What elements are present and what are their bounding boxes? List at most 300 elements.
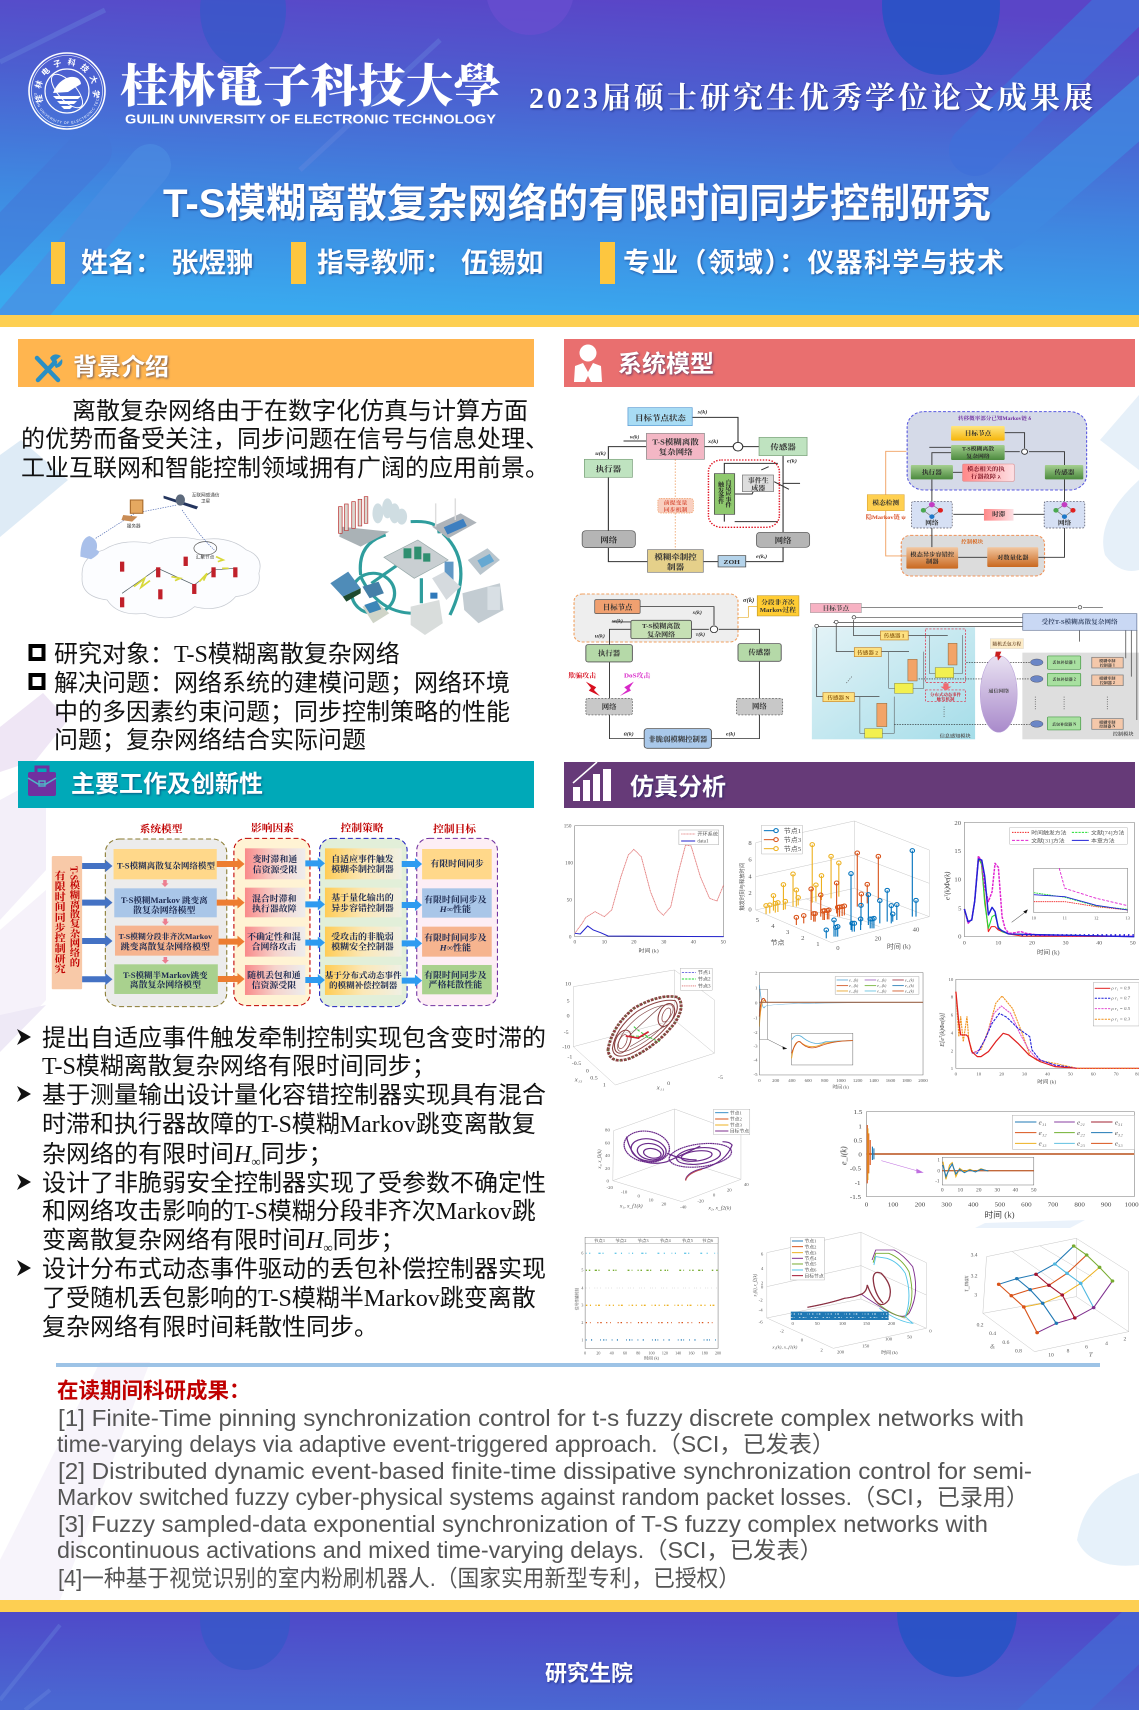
research achievements: [3] Fuzzy sampled-data exponential synchronization of T-S fuzzy complex networks with	[58, 1511, 988, 1537]
innovation bullet list: ∞	[323, 1240, 333, 1255]
chart: synchronization errors with inset: e₃₁	[1115, 1120, 1123, 1126]
chart: Lorenz butterfly attractor: 10	[649, 1198, 654, 1203]
chart: 3D trajectories with event bars: 0	[792, 1321, 795, 1326]
column headings	[140, 822, 478, 836]
chart: synchronization errors with inset: e₁₁	[1039, 1120, 1047, 1126]
innovation bullet list: 提出自适应事件触发牵制控制实现包含变时滞的	[42, 1025, 546, 1052]
diagram: distributed dynamic event: 受控T-S模糊离散复杂网络	[1042, 617, 1118, 626]
diagram: distributed dynamic event: 分布式动态事件	[930, 691, 962, 698]
chart: method comparison curve: 11	[1063, 916, 1067, 920]
chart: 3D trajectories with event bars: -6	[759, 1320, 763, 1324]
chart: error comparison curve: 100	[565, 861, 573, 866]
chart: error comparison curve: 30	[661, 941, 667, 946]
chart: expected error curves: 40	[1045, 1072, 1051, 1077]
chart: 3D phase trajectory: 5	[567, 999, 570, 1004]
diagram: piecewise Markov under attack: 复杂网络	[647, 630, 676, 638]
chart: synchronization errors with inset: 0	[937, 1169, 941, 1174]
author info row: 姓名：	[81, 248, 162, 278]
chart: expected error curves: 60	[1091, 1072, 1096, 1077]
chart: Lorenz butterfly attractor: 40	[744, 1182, 749, 1187]
diagram: Markov jump fault-tolerant: 执行器	[922, 468, 943, 476]
diagram: event-triggered pinning: 触发条件	[716, 481, 724, 505]
chart: method comparison curve: 文献[31]方法	[1031, 837, 1065, 844]
box labels: 模糊安全控制器	[331, 941, 394, 952]
innovation bullet list: 同步；	[261, 1141, 333, 1168]
chart: synchronization errors with inset: 20	[976, 1188, 982, 1193]
header banner	[0, 0, 1139, 330]
chart: event scatter: 200	[715, 1351, 721, 1355]
chart: error comparison curve: 0	[569, 935, 572, 940]
box labels: 离散复杂网络模型	[130, 979, 201, 989]
chart: expected error curves: 6	[951, 1013, 954, 1018]
chart: Lorenz butterfly attractor: 20	[605, 1166, 611, 1171]
simulation charts row 3 and 4	[574, 1109, 1139, 1362]
chart: synchronization errors with inset: e₃₃	[1115, 1141, 1123, 1148]
heading: main work: 主要工作及创新性	[71, 771, 263, 798]
chart: 3D trajectories with event bars: 0	[761, 1285, 764, 1289]
diagram: event-triggered pinning	[582, 408, 810, 572]
diagram: Markov jump fault-tolerant: 模态检测	[872, 498, 900, 507]
illustration: cloud sensor network: 服务器	[127, 522, 141, 529]
heading: main work	[18, 761, 534, 808]
chart: method comparison curve	[943, 820, 1136, 957]
diagram: piecewise Markov under attack: σ(k)	[743, 597, 754, 604]
diagram: distributed dynamic event: 模糊牵制	[1099, 658, 1116, 663]
diagram: piecewise Markov under attack: 传感器	[748, 648, 770, 657]
heading: background: 背景介绍	[73, 354, 169, 381]
innovation bullet list: 了受随机丢包影响的T-S模糊半Markov跳变离散	[42, 1285, 536, 1312]
column headings: 控制策略	[341, 822, 384, 835]
chart: expected error curves: ρ r₁ = 0.3	[1110, 1017, 1131, 1022]
diagram: piecewise Markov under attack: ū(k)	[624, 731, 634, 738]
innovation bullet list: 设计分布式动态事件驱动的丢包补偿控制器实现	[42, 1256, 546, 1283]
diagram: event-triggered pinning: 同步机制	[664, 506, 688, 514]
box labels: 自适应事件触发	[331, 853, 394, 864]
chart: convergence with inset: e₃₁(k)	[905, 978, 915, 982]
box labels: 有限时间同步及	[424, 969, 487, 980]
chart: error comparison curve: 时间 (k)	[639, 947, 659, 954]
chart: 3D stem trigger intervals: 6	[748, 857, 752, 864]
chart: 3D stem trigger intervals: 节点5	[784, 845, 802, 853]
research achievements	[57, 1379, 1032, 1591]
chart: Lorenz butterfly attractor: 0	[607, 1179, 610, 1184]
box labels: 受攻击的非脆弱	[331, 931, 394, 942]
chart: synchronization errors with inset: 1.5	[854, 1109, 863, 1116]
chart: synchronization errors with inset: e₁₂	[1039, 1130, 1047, 1137]
chart: synchronization errors with inset: 0	[941, 1188, 944, 1193]
chart: synchronization errors with inset: e₁₃	[1039, 1141, 1047, 1148]
chart: synchronization errors with inset: 0	[865, 1202, 869, 1208]
chart: synchronization errors with inset: 200	[915, 1202, 926, 1208]
chart: expected error curves: ρ r₁ = 0.5	[1110, 1006, 1131, 1011]
chart: event scatter: 4	[581, 1286, 584, 1290]
exhibition title: 2023届硕士研究生优秀学位论文成果展	[529, 82, 1093, 115]
chart: 3D phase trajectory: 0	[567, 1014, 570, 1019]
chart: synchronization errors with inset: 30	[994, 1188, 1000, 1193]
chart: 3D trajectories with event bars: 200	[888, 1321, 896, 1326]
box labels: T-S模糊分段非齐次Markov	[119, 931, 212, 941]
chart: 3D phase trajectory: 节点2	[698, 977, 711, 983]
chart: expected error curves: 50	[1068, 1072, 1074, 1077]
chart: synchronization errors with inset: e₂₂	[1077, 1130, 1086, 1137]
box labels: 模糊牵制控制器	[331, 863, 394, 874]
main title: T-S模糊离散复杂网络的有限时间同步控制研究	[163, 182, 991, 226]
chart: 3D surface mesh: δᵢ	[990, 1343, 995, 1350]
chart: 3D phase trajectory: -5	[718, 1075, 723, 1081]
diagram: event-triggered pinning: w(k)	[630, 436, 640, 441]
chart: 3D phase trajectory: 节点1	[698, 970, 711, 976]
flow arrows	[82, 857, 422, 987]
box labels: 混合时滞和	[252, 893, 297, 904]
chart: 3D trajectories with event bars: 2	[820, 1348, 824, 1353]
chart: 3D phase trajectory: x₁₃	[574, 1077, 582, 1084]
research object bullets: 解决问题：网络系统的建模问题；网络环境	[54, 670, 510, 697]
chart: expected error curves: ρ r₁ = 0.9	[1110, 986, 1131, 991]
diagram: piecewise Markov under attack: 网络	[602, 702, 616, 711]
diagram: Markov jump fault-tolerant: T-S模糊离散	[962, 445, 995, 452]
chart: convergence with inset: 2000	[918, 1078, 929, 1083]
chart: synchronization errors with inset: e_i(k)	[838, 1146, 848, 1165]
chart: 3D trajectories with event bars: 2	[761, 1281, 764, 1285]
chart: Lorenz butterfly attractor: x₂, x_f2(k)	[707, 1205, 732, 1212]
chart: Lorenz butterfly attractor: 节点1	[730, 1111, 742, 1116]
chart: Lorenz butterfly attractor: 节点2	[730, 1117, 743, 1123]
diagram: Markov jump fault-tolerant: 模态相关的执	[967, 465, 1005, 473]
illustration: cloud sensor network	[80, 492, 260, 618]
chart: convergence with inset: 1	[755, 986, 757, 990]
chart: 3D trajectories with event bars: 150	[862, 1344, 870, 1348]
chart: convergence with inset: e₁₃(k)	[849, 989, 859, 993]
research object bullets: 研究对象：T-S模糊离散复杂网络	[54, 641, 400, 668]
chart: expected error curves: E[eᵀ(k)Φe(k)]	[939, 1012, 946, 1048]
diagram: Markov jump fault-tolerant: 目标节点	[965, 429, 992, 438]
author info row: 张煜翀	[171, 247, 254, 278]
diagram: Markov jump fault-tolerant: 传感器	[1054, 468, 1075, 476]
diagram: Markov jump fault-tolerant: 网络	[925, 518, 939, 527]
chart: 3D phase trajectory: -5	[564, 1030, 569, 1036]
chart: 3D phase trajectory: 0	[586, 1069, 589, 1075]
chart: expected error curves: 70	[1114, 1072, 1119, 1077]
chart: event scatter: 时间 (k)	[644, 1355, 660, 1362]
author info row	[51, 242, 1004, 284]
root topic box: 有限时间同步控制研究	[53, 870, 66, 975]
chart: 3D phase trajectory: x₁₁	[656, 1085, 664, 1092]
innovation bullet list: 同步；	[333, 1227, 405, 1254]
innovation bullet list: 基于测量输出设计量化容错控制器实现具有混合	[42, 1082, 546, 1109]
diagram: piecewise Markov under attack: 非脆弱模糊控制器	[648, 735, 707, 743]
box labels: 严格耗散性能	[429, 979, 482, 989]
chart: 3D stem trigger intervals: 8	[748, 840, 752, 847]
diagram: distributed dynamic event: 目标节点	[823, 604, 850, 612]
diagram: Markov jump fault-tolerant: 隐Markov链 ψ	[866, 513, 907, 521]
chart: method comparison curve: 时间触发方法	[1031, 829, 1067, 836]
chart: event scatter: 40	[610, 1351, 614, 1355]
chart: 3D trajectories with event bars: 0	[929, 1329, 932, 1334]
chart: 3D stem trigger intervals: 0	[836, 945, 840, 952]
chart: convergence with inset: 0	[758, 1078, 761, 1083]
factor boxes	[245, 848, 305, 995]
chart: synchronization errors with inset: 300	[941, 1202, 953, 1208]
chart: 3D trajectories with event bars: 6	[761, 1252, 764, 1256]
chart: event scatter: 80	[636, 1351, 640, 1355]
innovation bullet list: 和网络攻击影响的T-S模糊分段非齐次Markov跳	[42, 1198, 536, 1225]
chart: synchronization errors with inset: 100	[888, 1202, 899, 1208]
diagram: event-triggered pinning: 复杂网络	[659, 447, 693, 457]
chart: event scatter: 信号传输时刻	[574, 1288, 580, 1310]
chart: expected error curves: 时间 (k)	[1037, 1078, 1056, 1085]
author info row: 指导教师：	[317, 248, 452, 278]
chart: synchronization errors with inset: 50	[1031, 1188, 1037, 1193]
chart: event scatter: 100	[649, 1351, 655, 1355]
chart: 3D surface mesh: 3	[974, 1293, 978, 1299]
chart: Lorenz butterfly attractor: 20	[727, 1188, 732, 1193]
box labels: 异步容错控制器	[331, 902, 394, 913]
chart: Lorenz butterfly attractor: 0	[713, 1193, 716, 1198]
chart: 3D trajectories with event bars: 100	[885, 1337, 893, 1342]
flow diagram: main work	[52, 822, 497, 1007]
chart: synchronization errors with inset: 700	[1048, 1202, 1059, 1208]
chart: 3D trajectories with event bars: -4	[759, 1308, 763, 1313]
chart: 3D trajectories with event bars: x₁(k), x_f1(k)	[771, 1345, 798, 1350]
chart: 3D surface mesh: 3.4	[971, 1253, 978, 1259]
diagram: distributed dynamic event: 控制器 N	[1099, 724, 1116, 729]
diagram: piecewise Markov under attack: 网络	[752, 702, 767, 711]
box labels: 随机丢包和通	[247, 969, 301, 980]
chart: 3D trajectories with event bars: 0	[801, 1338, 804, 1343]
root topic box: T-S模糊离散复杂网络的	[67, 866, 80, 967]
illustration: smart grid city	[330, 497, 504, 635]
diagram: distributed dynamic event: 控制器 2	[1100, 680, 1115, 685]
chart: 3D phase trajectory: 10	[565, 982, 571, 988]
illustration: cloud sensor network: 汇聚节点	[196, 553, 215, 560]
chart: error comparison curve: data1	[697, 840, 709, 845]
diagram: distributed dynamic event: 传感器 N	[827, 694, 850, 701]
diagram: event-triggered pinning: 网络	[775, 535, 792, 545]
heading: background	[18, 339, 534, 387]
box labels: 合网络攻击	[252, 941, 297, 952]
diagram: event-triggered pinning: s(k)	[697, 409, 707, 416]
author info row: 专业（领域）：仪器科学与技术	[623, 248, 1004, 278]
box labels: 有限时间同步及	[424, 894, 487, 904]
chart: 3D surface mesh: 6	[1085, 1345, 1088, 1350]
diagram: piecewise Markov under attack: 欺骗攻击	[568, 671, 597, 680]
goal boxes	[422, 849, 492, 994]
chart: 3D phase trajectory: -10	[562, 1045, 570, 1051]
chart: 3D trajectories with event bars: 节点5	[804, 1262, 817, 1268]
chart: error comparison curve: 20	[631, 941, 637, 946]
innovation bullet list: 杂网络的有限时间H	[42, 1142, 251, 1168]
diagram: event-triggered pinning: u(k)	[595, 450, 606, 457]
box labels: T-S模糊Markov 跳变离	[121, 895, 208, 905]
innovation bullet list: 设计了非脆弱安全控制器实现了受参数不确定性	[42, 1170, 546, 1197]
chart: event scatter: 180	[702, 1351, 708, 1355]
chart: Lorenz butterfly attractor: 20	[662, 1202, 667, 1207]
chart: 3D surface mesh: 0.8	[1015, 1349, 1022, 1355]
chart: 3D surface mesh	[963, 1238, 1129, 1359]
chart: Lorenz butterfly attractor: 60	[605, 1141, 611, 1145]
chart: convergence with inset: e₃₃(k)	[905, 989, 915, 993]
chart: expected error curves: 0	[955, 1072, 958, 1077]
chart: expected error curves: 10	[949, 977, 954, 982]
research object bullets	[30, 641, 510, 754]
university logo: 桂林电子科技大学	[34, 58, 100, 103]
chart: synchronization errors with inset: e₃₂	[1115, 1130, 1123, 1137]
diagram: event-triggered pinning: ZOH	[724, 558, 740, 566]
chart: synchronization errors with inset: -1.5	[850, 1194, 862, 1201]
research object bullets: 问题；复杂网络结合实际问题	[54, 727, 366, 754]
diagram: Markov jump fault-tolerant: 网络	[1058, 518, 1072, 527]
chart: 3D surface mesh: 0.2	[977, 1323, 984, 1329]
diagram: event-triggered pinning: 目标节点状态	[635, 413, 687, 422]
chart: Lorenz butterfly attractor: -40	[680, 1205, 687, 1209]
diagram: event-triggered pinning: 自适应事件	[724, 479, 731, 509]
heading: system model	[564, 339, 1135, 387]
chart: method comparison curve: 50	[1130, 941, 1136, 946]
diagram: Markov jump fault-tolerant: 控制模块	[961, 538, 984, 545]
diagram: piecewise Markov under attack: u(k)	[595, 633, 605, 639]
chart: convergence with inset: 0	[755, 1001, 758, 1005]
diagram: distributed dynamic event: 控制模块	[1113, 731, 1134, 737]
innovation bullet list: 时滞和执行器故障的T-S模糊Markov跳变离散复	[42, 1111, 536, 1138]
column headings: 影响因素	[251, 822, 295, 835]
chart: convergence with inset: 200	[772, 1078, 780, 1083]
chart: error comparison curve: 40	[691, 941, 696, 946]
chart: convergence with inset	[754, 971, 929, 1090]
chart: convergence with inset: 600	[805, 1078, 813, 1083]
illustration: cloud sensor network: 互联网感通信	[192, 492, 220, 499]
chart: error comparison curve: 150	[564, 824, 572, 829]
column headings: 控制目标	[433, 823, 478, 836]
chart: synchronization errors with inset: -0.5	[850, 1166, 862, 1173]
chart: 3D phase trajectory: 1	[603, 1083, 606, 1089]
diagram: distributed dynamic event: 传感器 1	[884, 632, 905, 640]
chart: 3D trajectories with event bars: 时间 (k)	[881, 1349, 898, 1356]
chart: 3D stem trigger intervals: 3	[786, 929, 789, 936]
chart: method comparison curve: 10	[995, 941, 1002, 946]
diagram: distributed dynamic event: 随机丢包方程	[992, 641, 1022, 647]
diagram: piecewise Markov under attack: w(k)	[612, 618, 623, 625]
chart: 3D phase trajectory: 0.5	[590, 1076, 598, 1081]
diagram: distributed dynamic event: 信息感知模块	[940, 733, 971, 739]
diagram: event-triggered pinning: 传感器	[770, 442, 796, 451]
system model diagrams	[568, 408, 1139, 748]
author info row: 伍锡如	[461, 247, 544, 278]
illustration: cloud sensor network: 卫星	[201, 498, 211, 503]
chart: 3D surface mesh: T	[1089, 1352, 1093, 1359]
chart: 3D phase trajectory: -1	[567, 1055, 572, 1060]
chart: convergence with inset: 400	[788, 1078, 796, 1083]
chart: 3D trajectories with event bars: 150	[863, 1321, 871, 1326]
chart: 3D stem trigger intervals: 5	[756, 917, 759, 924]
box labels: H∞性能	[439, 942, 471, 953]
diagram: distributed dynamic event: 模糊牵制	[1099, 720, 1116, 724]
diagram: Markov jump fault-tolerant: 转移概率部分已知Markov链 δ	[958, 414, 1031, 422]
chart: convergence with inset: 1000	[836, 1078, 847, 1083]
chart: Lorenz butterfly attractor: 40	[605, 1153, 611, 1158]
diagram: event-triggered pinning: 执行器	[596, 464, 621, 473]
chart: method comparison curve: 12	[1094, 916, 1098, 920]
footer text: 研究生院	[545, 1661, 633, 1686]
chart: 3D stem trigger intervals	[738, 821, 929, 952]
chart: 3D trajectories with event bars: 节点1	[804, 1239, 816, 1245]
diagram: event-triggered pinning: e(k)	[787, 458, 797, 464]
chart: 3D stem trigger intervals: 2	[748, 890, 752, 897]
diagram: Markov jump fault-tolerant: 对数量化器	[997, 554, 1028, 561]
chart: 3D phase trajectory: 0	[667, 1081, 670, 1087]
diagram: event-triggered pinning: 前提变量	[664, 499, 688, 507]
root topic box	[52, 856, 82, 989]
chart: synchronization errors with inset: e₂₁	[1077, 1120, 1085, 1126]
chart: event scatter: 160	[688, 1351, 695, 1355]
chart: method comparison curve: 本章方法	[1091, 837, 1115, 844]
chart: event scatter: 20	[596, 1351, 601, 1355]
column headings: 系统模型	[140, 823, 183, 836]
diagram: piecewise Markov under attack: e(k)	[726, 731, 735, 738]
chart: 3D trajectories with event bars: 50	[907, 1335, 913, 1339]
chart: convergence with inset: -4	[754, 1058, 758, 1063]
chart: synchronization errors with inset: 时间 (k)	[984, 1210, 1015, 1220]
diagram: event-triggered pinning: x(k)	[707, 438, 718, 445]
chart: synchronization errors with inset: 1	[858, 1124, 862, 1130]
chart: event scatter: 2	[581, 1321, 584, 1325]
chart: Lorenz butterfly attractor: x₁, x_f1(k)	[619, 1203, 643, 1209]
chart: 3D surface mesh: 4	[1105, 1341, 1108, 1347]
chart: convergence with inset: 1400	[869, 1078, 879, 1083]
chart: error comparison curve	[564, 824, 726, 954]
chart: convergence with inset: -1	[754, 1016, 758, 1020]
chart: synchronization errors with inset: -1	[855, 1180, 861, 1187]
chart: 3D stem trigger intervals: 触发时刻与释放时间	[738, 862, 746, 911]
diagram: event-triggered pinning: T-S模糊离散	[652, 437, 699, 446]
chart: 3D surface mesh: 8	[1067, 1349, 1070, 1355]
box labels: 散复杂网络模型	[133, 904, 196, 915]
chart: 3D trajectories with event bars: 100	[839, 1321, 847, 1326]
chart: expected error curves: 10	[976, 1072, 982, 1077]
heading: simulation: 仿真分析	[630, 774, 726, 801]
diagram: event-triggered pinning: 制器	[667, 562, 684, 572]
box labels: 跳变离散复杂网络模型	[121, 941, 210, 951]
chart: event scatter: 0	[584, 1351, 586, 1355]
simulation charts row 1 and 2	[562, 820, 1139, 1092]
chart: 3D trajectories with event bars: 节点3	[804, 1251, 817, 1256]
chart: synchronization errors with inset: 600	[1021, 1202, 1032, 1208]
achievements divider	[56, 1363, 1100, 1367]
chart: method comparison curve: 时间 (k)	[1037, 948, 1060, 957]
chart: 3D surface mesh: 10	[1048, 1353, 1054, 1359]
chart: convergence with inset: 时间 (k)	[832, 1084, 849, 1090]
chart: 3D stem trigger intervals: 2	[801, 935, 804, 942]
innovation bullet list	[17, 1025, 546, 1341]
chart: synchronization errors with inset: -1	[935, 1180, 940, 1185]
chart: method comparison curve: 0	[963, 941, 966, 946]
chart: 3D surface mesh: 3.2	[971, 1274, 978, 1279]
diagram: piecewise Markov under attack: 分段非齐次	[761, 598, 795, 607]
chart: 3D phase trajectory: 节点3	[698, 984, 711, 990]
chart: synchronization errors with inset: 0	[858, 1152, 863, 1158]
chart: event scatter: 120	[662, 1351, 668, 1355]
chart: 3D surface mesh: τ_max	[963, 1276, 971, 1292]
chart: method comparison curve: 13	[1125, 916, 1130, 920]
diagram: Markov jump fault-tolerant: 行器故障 λ	[971, 473, 1001, 480]
diagram: piecewise Markov under attack: τ(k)	[696, 631, 705, 638]
chart: convergence with inset: e₁₁(k)	[849, 978, 859, 982]
background paragraph	[21, 398, 549, 482]
innovation bullet list: 变离散复杂网络有限时间H	[42, 1228, 323, 1254]
chart: method comparison curve: 5	[958, 906, 961, 913]
chart: convergence with inset: e₁₂(k)	[849, 984, 859, 988]
box labels: 有限时间同步及	[424, 932, 487, 943]
chart: event scatter: 节点1	[594, 1238, 605, 1244]
